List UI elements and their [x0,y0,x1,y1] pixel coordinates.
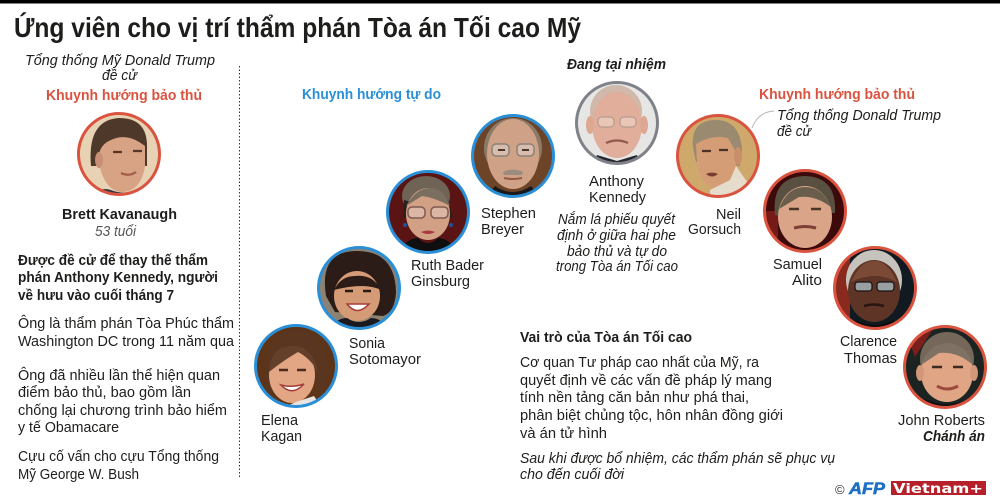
note: swing vote: trong Tòa án Tối cao [556,258,678,275]
nominee heading: Tổng thống Mỹ Donald Trump [25,52,215,69]
title: Ứng viên cho vị trí thẩm phán Tòa án Tối cao Mỹ [14,12,581,43]
role description [520,354,783,442]
label: Anthony Kennedy: Kennedy [589,189,646,206]
portrait: Stephen Breyer [472,115,554,200]
callout: nominated by Trump: Tổng thống Donald Trump [777,107,941,124]
label: Stephen Breyer: Stephen [481,205,536,222]
credits: AFP and Vietnam+ logos: Vietnam+ [893,482,983,497]
portrait: Clarence Thomas [834,247,916,332]
label: Ruth Bader Ginsburg: Ginsburg [411,273,470,290]
label: Sonia Sotomayor [349,335,421,368]
label: Ruth Bader Ginsburg: Ruth Bader [411,257,484,274]
note: swing vote: Nắm lá phiếu quyết [558,211,676,228]
nominee career text [18,315,235,350]
label: Samuel Alito: Samuel [773,256,822,273]
nominee heading: đề cử [102,67,138,84]
role note [520,450,836,483]
role description: và án tử hình [520,425,607,442]
callout: nominated by Trump: đề cử [777,123,812,140]
portrait: John Roberts [904,326,986,411]
heading: liberal: Khuynh hướng tự do [302,86,441,103]
label: Samuel Alito: Alito [792,272,822,289]
note: swing vote [556,211,678,275]
callout: nominated by Trump [752,107,941,140]
nominee views text: y tế Obamacare [18,419,119,436]
credits: AFP and Vietnam+ logos [835,479,986,498]
portrait: Anthony Kennedy [576,82,658,167]
label: Ruth Bader Ginsburg [411,257,484,290]
label: Stephen Breyer: Breyer [481,221,524,238]
nominee adviser text: Mỹ George W. Bush [18,466,139,483]
portrait: Sonia Sotomayor [318,247,400,332]
nominee views text [18,367,227,436]
label: Samuel Alito [773,256,822,289]
note: swing vote: định ở giữa hai phe [557,227,676,244]
label: John Roberts [898,412,985,445]
label: Elena Kagan: Elena [261,412,299,429]
role note: Sau khi được bổ nhiệm, các thẩm phán sẽ phục vụ [520,450,836,467]
portrait: Samuel Alito [764,170,846,252]
role note: cho đến cuối đời [520,466,625,483]
label: Neil Gorsuch: Gorsuch [688,221,741,238]
label: Clarence Thomas: Thomas [844,350,897,367]
label: Clarence Thomas [840,333,897,367]
label: Clarence Thomas: Clarence [840,333,897,350]
nominee career text: Ông là thẩm phán Tòa Phúc thẩm [18,315,234,332]
label: Elena Kagan: Kagan [261,428,302,445]
nominee name [62,206,177,240]
panel: role of the Supreme Court [520,329,836,483]
nominee name: 53 tuổi [95,223,137,240]
portrait: Ruth Bader Ginsburg [387,171,469,254]
portrait: Neil Gorsuch [677,115,759,200]
label: Neil Gorsuch [688,206,741,238]
heading: in office: Đang tại nhiệm [567,56,666,73]
credits: AFP and Vietnam+ logos: © [835,482,845,497]
credits: AFP and Vietnam+ logos: AFP [848,479,886,498]
role description: Cơ quan Tư pháp cao nhất của Mỹ, ra [520,354,760,371]
heading: conservative: Khuynh hướng bảo thủ [759,86,915,103]
label: Anthony Kennedy [589,173,646,206]
nominee lead text: Được đề cử để thay thế thẩm [18,252,208,269]
portrait: Elena Kagan [255,325,337,408]
role description: phân biệt chủng tộc, hôn nhân đồng giới [520,407,783,424]
nominee views text: Ông đã nhiều lần thể hiện quan [18,367,220,384]
label: Stephen Breyer [481,205,536,238]
nominee heading: Khuynh hướng bảo thủ [46,87,202,104]
nominee name: Brett Kavanaugh [62,206,177,223]
label: John Roberts: John Roberts [898,412,985,429]
role heading: Vai trò của Tòa án Tối cao [520,329,692,346]
panel: nominee [18,52,235,483]
label: Neil Gorsuch: Neil [716,206,741,223]
label: John Roberts: Chánh án [923,428,985,445]
label: Sonia Sotomayor: Sonia [349,335,386,352]
label: Elena Kagan [261,412,302,445]
portrait: Brett Kavanaugh [78,113,160,198]
label: Anthony Kennedy: Anthony [589,173,644,190]
nominee career text: Washington DC trong 11 năm qua [18,333,235,350]
nominee heading [25,52,215,104]
role description: quyết định về các vấn đề pháp lý mang [520,372,772,389]
note: swing vote: bảo thủ và tự do [567,243,667,260]
nominee lead text: phán Anthony Kennedy, người [18,269,218,286]
nominee lead text [18,252,218,304]
nominee adviser text [18,448,219,483]
label: Sonia Sotomayor: Sotomayor [349,351,421,368]
nominee adviser text: Cựu cố vấn cho cựu Tổng thống [18,448,219,465]
role description: tính nền tảng căn bản như phá thai, [520,389,749,406]
nominee lead text: về hưu vào cuối tháng 7 [18,287,174,304]
nominee views text: điểm bảo thủ, bao gồm lần [18,384,191,401]
nominee views text: chống lại chương trình bảo hiểm [18,402,227,419]
